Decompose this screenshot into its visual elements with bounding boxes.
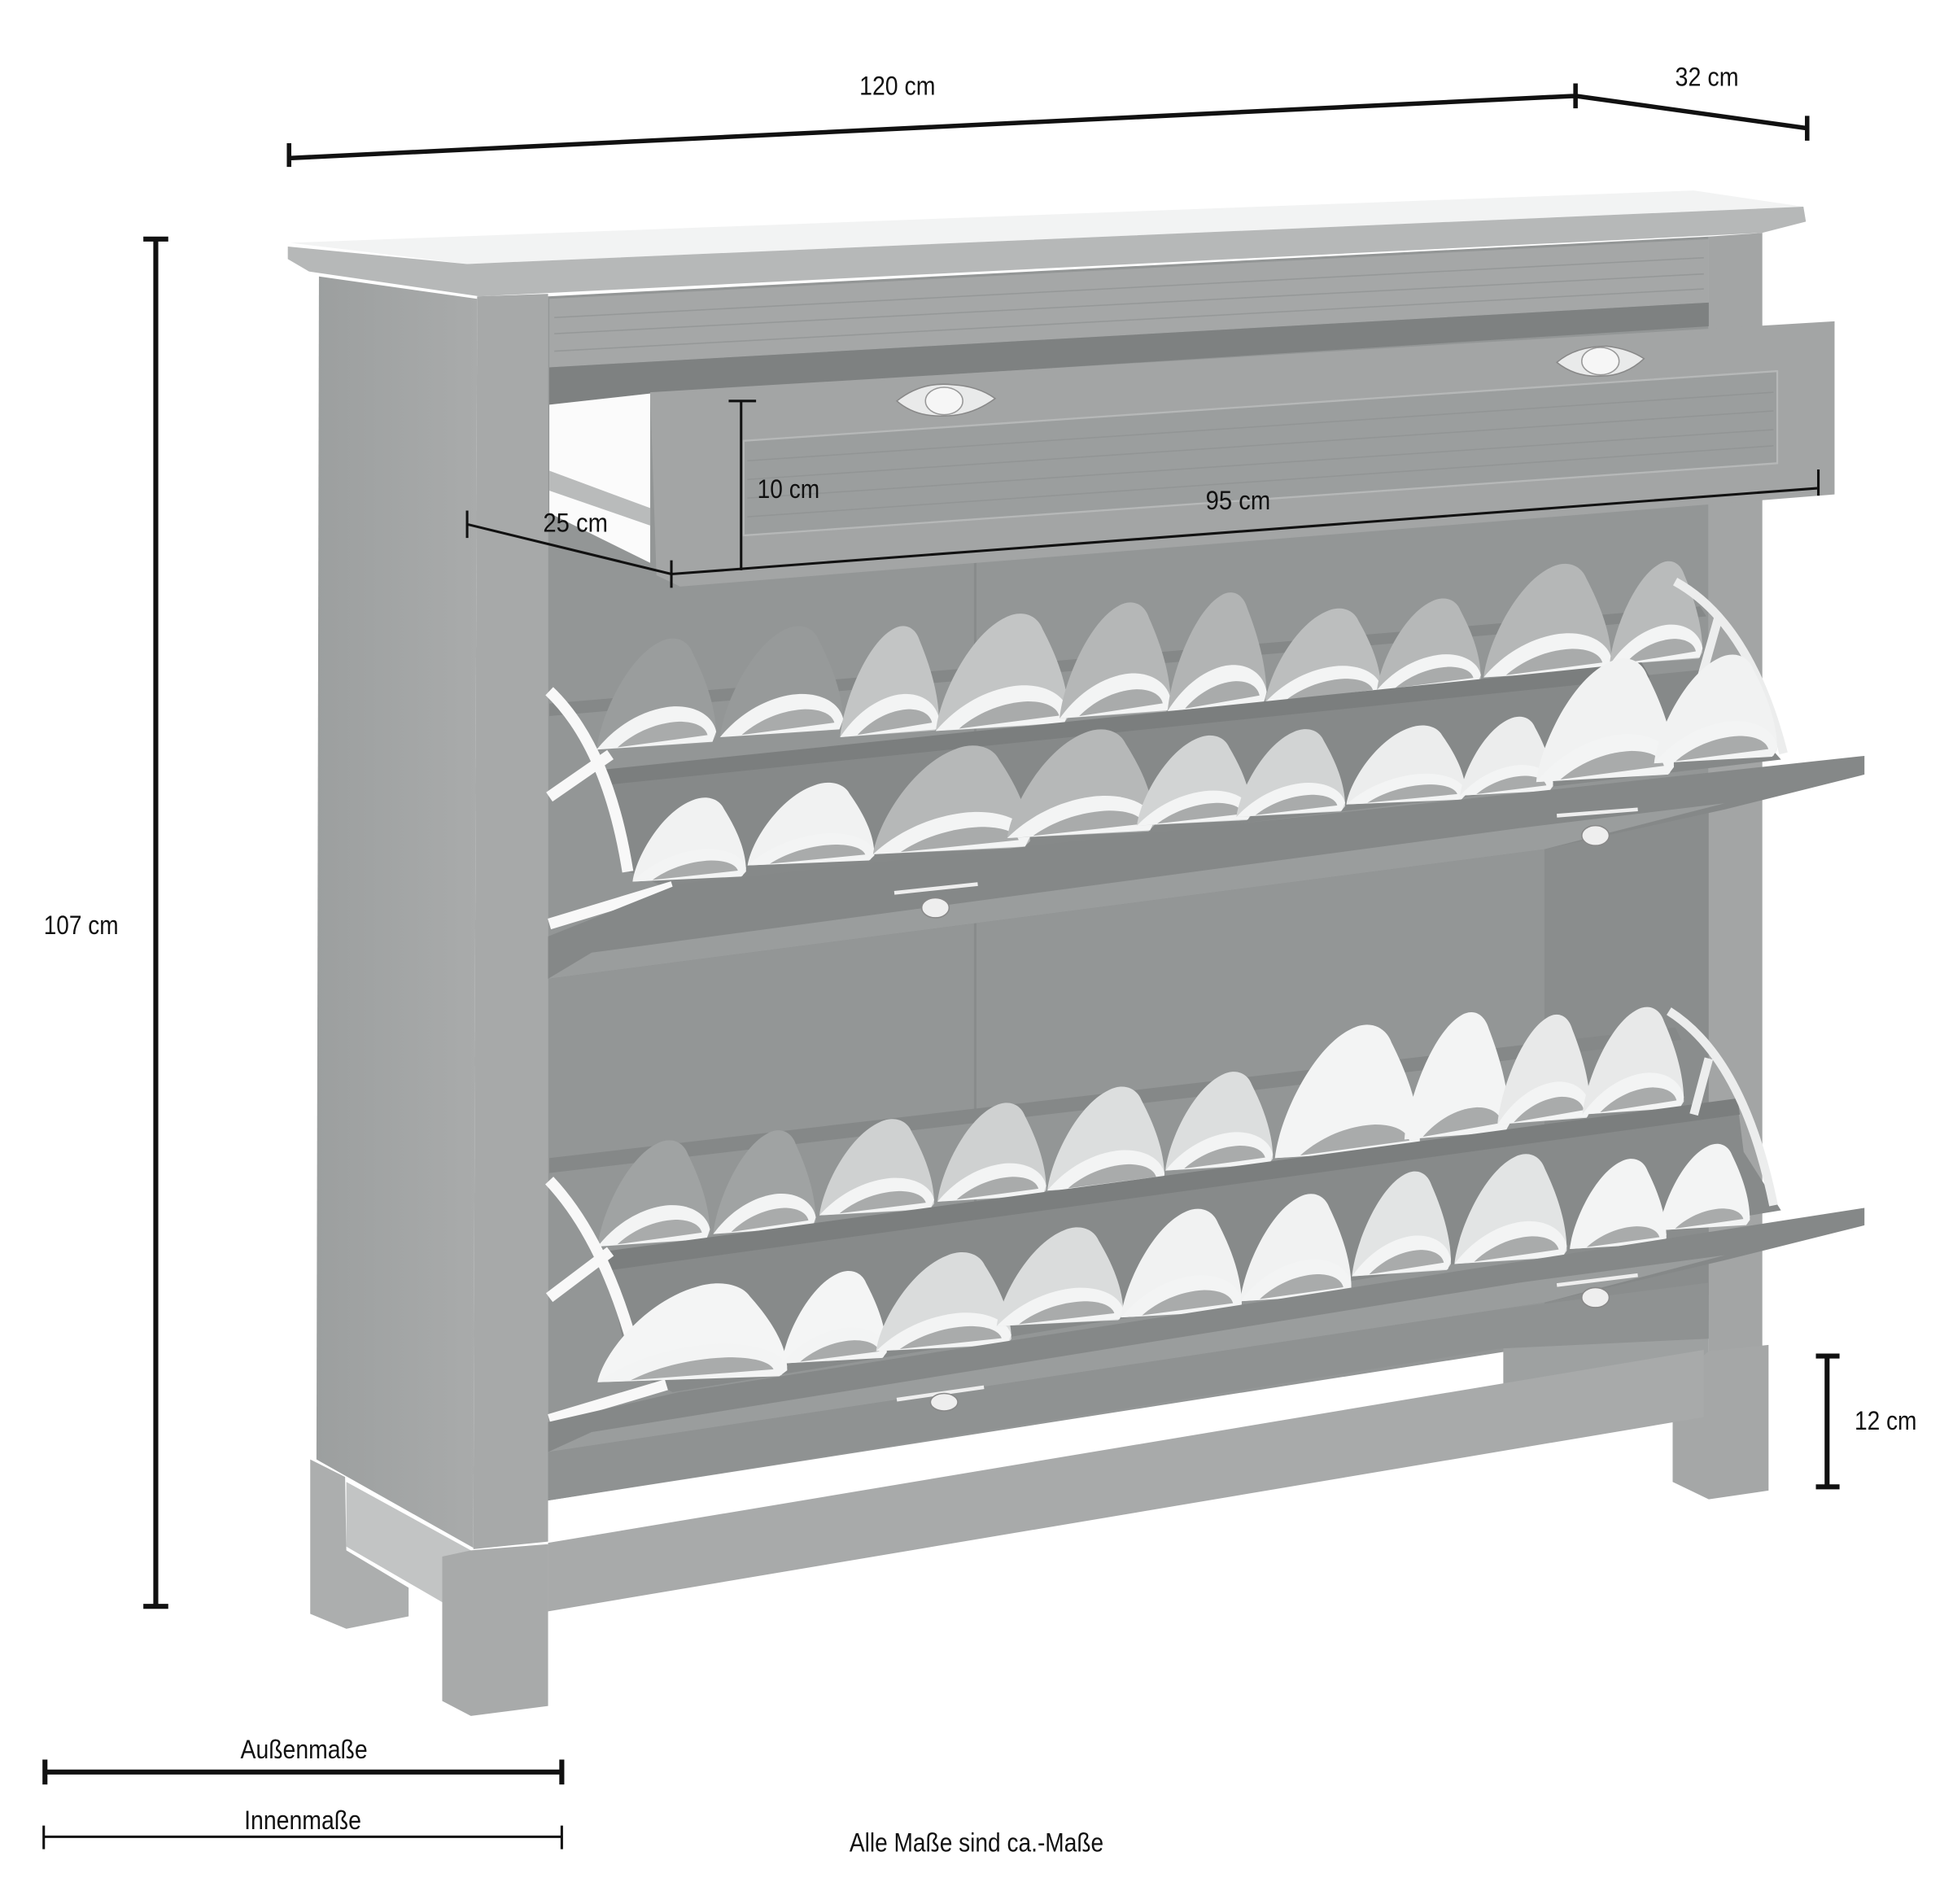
worktop surface: [291, 190, 1803, 264]
lower rail: [548, 1282, 1709, 1500]
drawer runner: [549, 470, 650, 526]
right post: [1709, 233, 1763, 1357]
drawer panel: [744, 371, 1777, 535]
rear right leg: [1503, 1295, 1709, 1385]
front left post: [474, 294, 548, 1549]
dimension: depth 32 cm: 32 cm: [1676, 63, 1739, 92]
upper tray lip: [604, 662, 1650, 784]
upper flap inner panel: [548, 803, 1725, 979]
legend: outer dimensions: [45, 1735, 561, 1784]
lower tray inner: [606, 1102, 1781, 1392]
legend: inner dimensions: Innenmaße: [244, 1806, 361, 1835]
dimension: height 107 cm: 107 cm: [44, 911, 119, 940]
drawer front: [650, 321, 1834, 587]
cabinet interior back: [548, 237, 1709, 1500]
interior darker right section: [1544, 810, 1709, 1320]
lower front shoes: [597, 1144, 1750, 1382]
interior divider: [974, 561, 976, 1369]
dimension: height 107 cm: [44, 239, 168, 1606]
upper flap left knob: [894, 884, 978, 918]
cabinet: [288, 190, 1806, 1716]
dimension: drawer height 10 cm: 10 cm: [758, 474, 819, 504]
upper right hinge: [1676, 582, 1784, 753]
dimension: drawer depth 25 cm: [467, 508, 671, 587]
dimension: width 120 cm: 120 cm: [859, 71, 935, 100]
lower rear shoes: [597, 1007, 1684, 1247]
drawer side white: [549, 394, 650, 563]
dimension: drawer depth 25 cm: 25 cm: [543, 508, 608, 537]
upper left hinge: [549, 691, 673, 924]
upper shoe compartment: [548, 561, 1864, 979]
dimension: drawer width 95 cm: [671, 469, 1819, 574]
dimension: width 120 cm: [289, 71, 1575, 167]
shaded drawer recess: [549, 303, 1709, 404]
legend: inner dimensions: [44, 1806, 561, 1849]
lower flap: [548, 1207, 1864, 1452]
lower flap inner panel: [548, 1256, 1725, 1452]
lower back ledge: [549, 1028, 1681, 1173]
right foot and leg: [1673, 1345, 1768, 1500]
front left foot: [442, 1544, 548, 1716]
upper back ledge: [549, 606, 1706, 716]
rear left leg and apron: [310, 1460, 471, 1629]
lower tray lip: [604, 1098, 1740, 1270]
note: Alle Maße sind ca.-Maße: [850, 1828, 1103, 1858]
drawer right handle: [1557, 346, 1644, 376]
dimension: leg height 12 cm: [1815, 1356, 1916, 1487]
dimension: leg height 12 cm: 12 cm: [1855, 1406, 1916, 1435]
upper tray inner: [606, 670, 1781, 890]
dimension: depth 32 cm: [1575, 63, 1807, 141]
upper flap right knob: [1557, 810, 1638, 845]
worktop moulding: [288, 207, 1806, 296]
upper front shoes: [632, 655, 1777, 882]
side panel: [317, 277, 477, 1548]
dimension: drawer height 10 cm: [728, 401, 819, 570]
lower right hinge: [1669, 1011, 1773, 1205]
dimension: drawer width 95 cm: 95 cm: [1206, 486, 1270, 515]
lower shoe compartment: [548, 1007, 1864, 1452]
lower flap left knob: [897, 1387, 984, 1411]
legend: outer dimensions: Außenmaße: [241, 1735, 368, 1764]
upper rear shoes: [596, 561, 1702, 749]
bottom stretcher: [548, 1350, 1704, 1611]
drawer: [549, 321, 1834, 587]
lower flap right knob: [1557, 1275, 1638, 1308]
lower left hinge: [549, 1181, 666, 1420]
drawer left handle: [897, 384, 995, 416]
upper flap: [548, 756, 1864, 979]
upper front rail: [549, 239, 1709, 367]
